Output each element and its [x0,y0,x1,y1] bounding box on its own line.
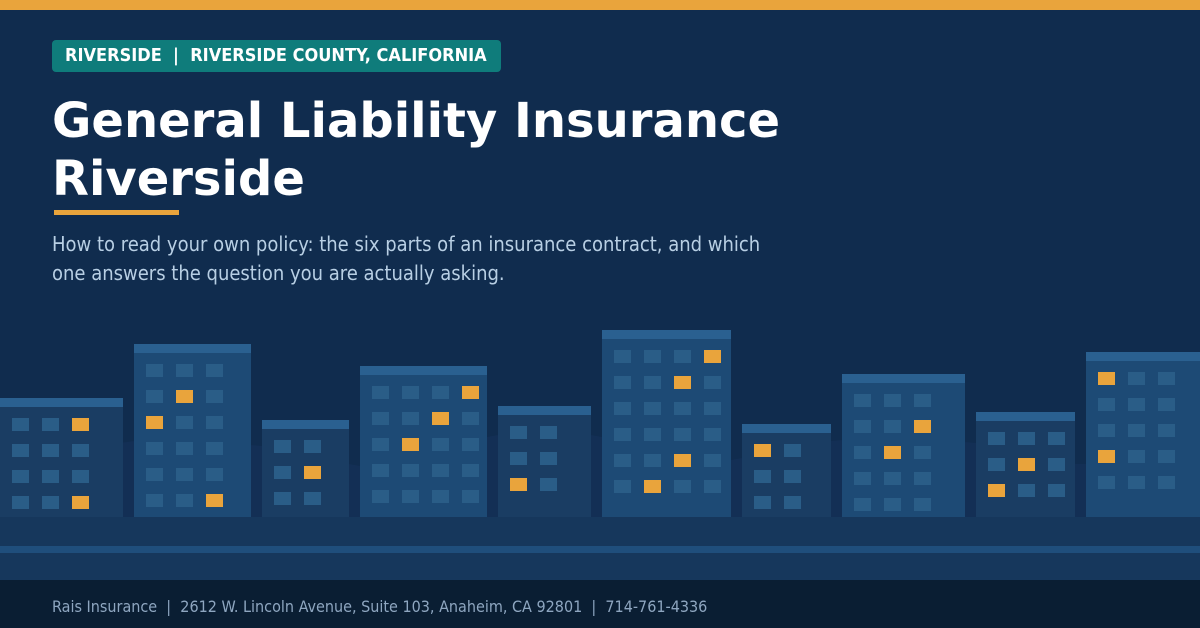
footer bar [0,580,1200,628]
road stripe [0,546,1200,553]
building 4 [360,366,487,517]
title underline [54,210,179,215]
footer text: Rais Insurance | 2612 W. Lincoln Avenue, Suite 103, Anaheim, CA 92801 | 714-761-4336 [52,597,707,616]
building 1 [0,398,123,517]
background skyline [0,435,1200,517]
ground [0,517,1200,580]
building 2 [134,344,251,517]
subtitle: How to read your own policy: the six parts of an insurance contract, and which one answers the question you are actually asking. [52,232,760,285]
building 7 [742,424,831,517]
title: General Liability Insurance Riverside [52,93,780,207]
building 5 [498,406,591,517]
top accent bar [0,0,1200,10]
location badge: RIVERSIDE | RIVERSIDE COUNTY, CALIFORNIA [65,45,487,66]
location badge [52,40,501,72]
building 8 [842,374,965,517]
building 9 [976,412,1075,517]
building 6 [602,330,731,517]
building 10 [1086,352,1200,517]
building 3 [262,420,349,517]
